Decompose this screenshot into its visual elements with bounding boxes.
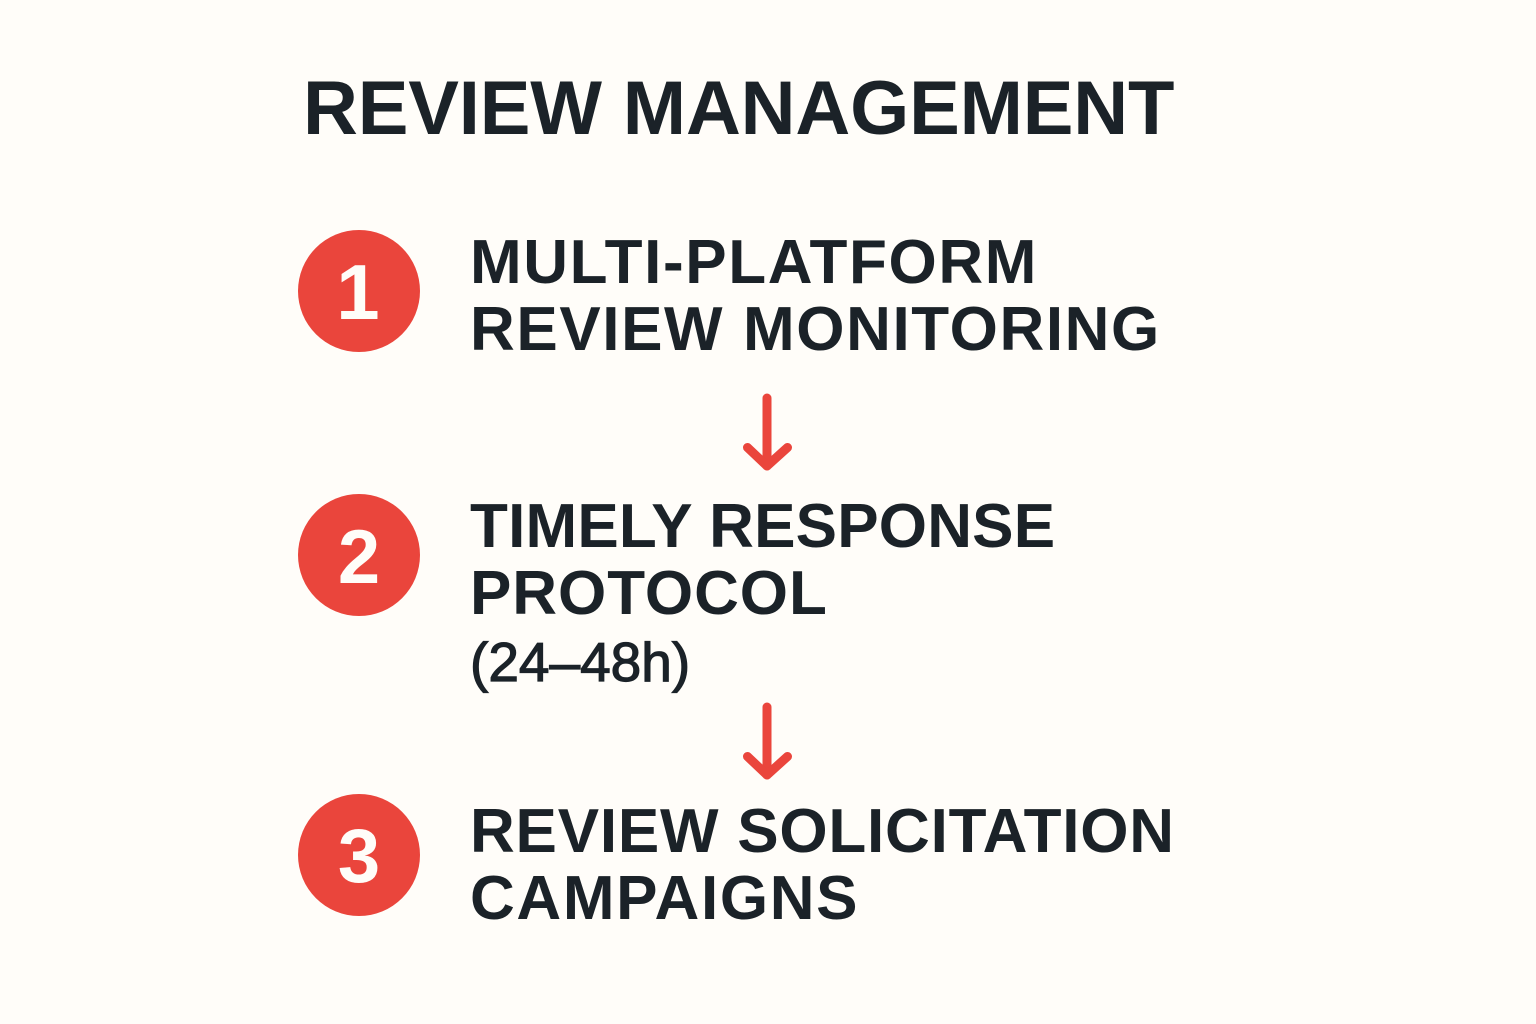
step 2 label [470, 492, 1055, 628]
step 1 number badge: 1 [336, 248, 380, 336]
step 2 label: TIMELY RESPONSE [470, 492, 1055, 561]
step 1 number badge [298, 230, 420, 352]
arrow 2 to 3 [743, 702, 792, 780]
arrow 1 to 2 [743, 394, 792, 470]
step 3 label: CAMPAIGNS [470, 864, 859, 933]
step 3 number badge: 3 [338, 814, 380, 899]
step 2 number badge [298, 494, 420, 616]
step 2 note: (24–48h) [470, 631, 690, 693]
title: REVIEW MANAGEMENT [303, 66, 1174, 151]
step 1 label: REVIEW MONITORING [470, 295, 1161, 364]
step 3 label: REVIEW SOLICITATION [470, 797, 1175, 866]
step 1 label: MULTI-PLATFORM [470, 228, 1038, 297]
step 2 label: PROTOCOL [470, 559, 828, 628]
step 2 number badge: 2 [338, 515, 380, 600]
step 1 label [470, 228, 1161, 364]
step 3 label [470, 797, 1175, 933]
